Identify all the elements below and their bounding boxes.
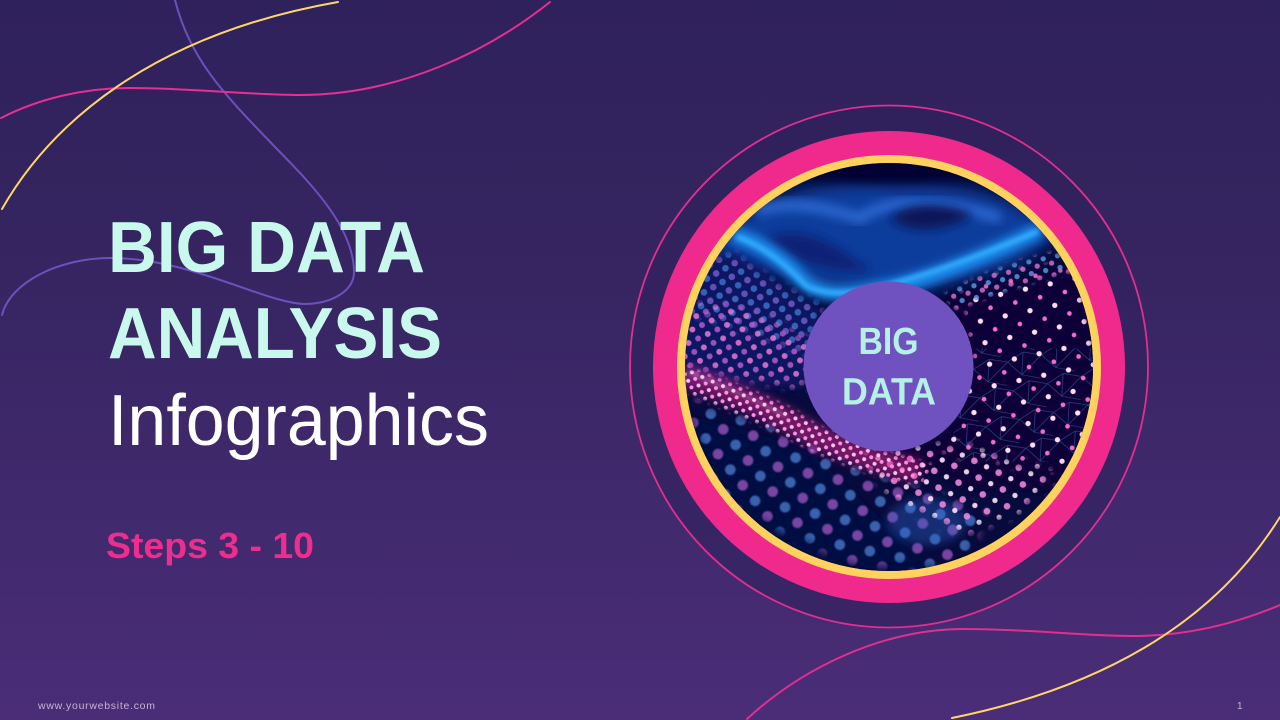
top-left decorative curves [1,0,550,315]
thin outer ring [630,106,1148,628]
right pink dots [933,262,1100,475]
upper blue wave [700,184,1060,298]
pink ring [653,131,1125,603]
network mesh [953,348,1100,462]
footer website: www.yourwebsite.com [37,700,155,712]
subtitle: Infographics [108,381,489,461]
bottom-right decorative curves [747,517,1280,719]
yellow ring [677,155,1101,579]
bright cyan ridge [733,230,1040,294]
lower deep navy field [690,414,933,571]
title: ANALYSIS [108,294,442,374]
badge circle [804,282,974,452]
badge label: DATA [842,372,936,414]
badge label: BIG [858,321,918,363]
page number: 1 [1237,701,1243,712]
badge label [842,321,936,414]
steps label: Steps 3 - 10 [106,525,314,566]
right dark field [901,262,1093,494]
lower soft glow [887,498,967,545]
hero circle: concentric rings with photo and badge [630,106,1148,628]
right top pale-blue dots [943,250,1070,312]
upper-left pink dots [685,297,810,394]
bright magenta wave [683,375,920,472]
central flow dots [853,438,1067,538]
far blue dots [692,248,826,358]
title [108,208,442,374]
dark sky [804,163,974,187]
large lower-left dots [692,396,991,571]
title: BIG DATA [108,208,425,288]
left dark mid band [673,252,823,388]
photo: glowing data wave [685,163,1093,571]
